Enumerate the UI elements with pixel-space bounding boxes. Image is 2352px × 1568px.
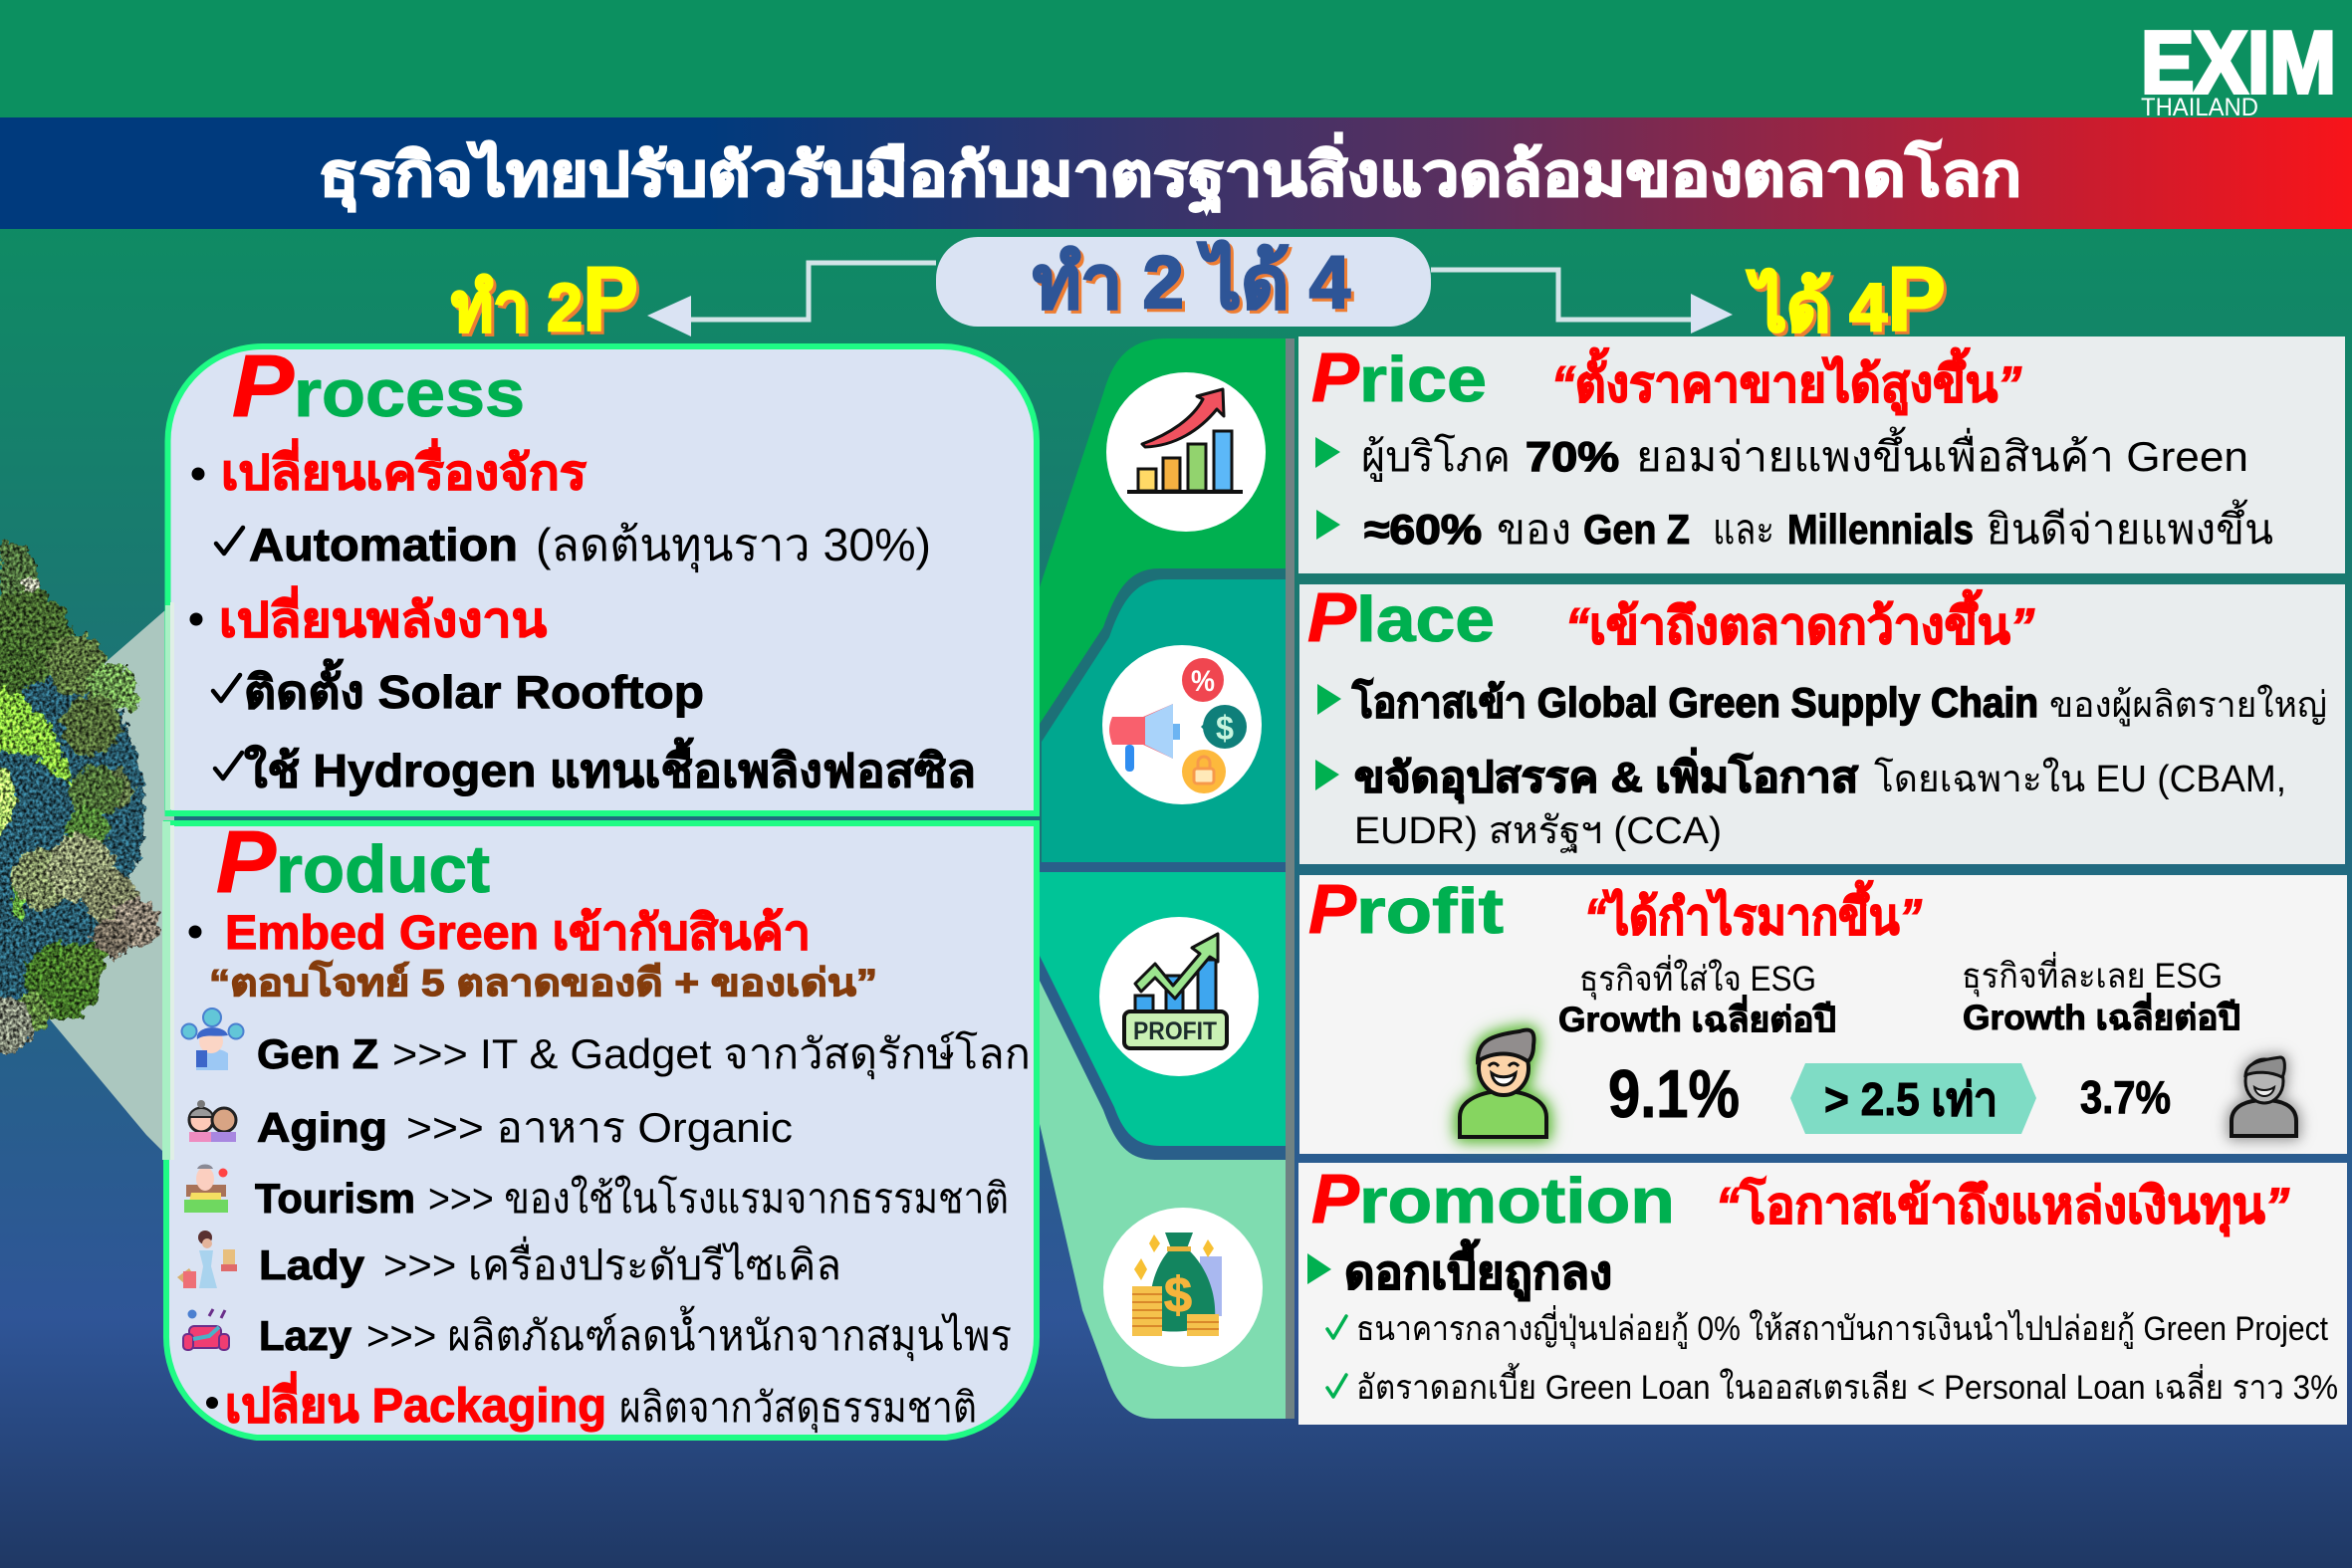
logo: EXIM Thailand: THAILAND [2141, 94, 2258, 121]
panel: place [1299, 578, 2345, 864]
icon: profit growth chart: PROFIT [1133, 1017, 1217, 1045]
heading: do 2P: ทำ 2 [451, 270, 583, 345]
bullet: remove barriers: ขจัดอุปสรรค & เพิ่มโอกาส [1354, 748, 1858, 803]
text: hydrogen: ใช้ Hydrogen แทนเชื้อเพลิงฟอสซิล [244, 737, 976, 796]
arrow: to 2P [647, 263, 936, 336]
panel: process [167, 336, 1037, 813]
panel: promotion [1298, 1160, 2347, 1425]
title banner [0, 117, 2352, 229]
row: Tourism: Tourism [255, 1175, 415, 1222]
heading: get 4P [1747, 249, 1946, 350]
row: Gen Z: >>> IT & Gadget จากวัสดุรักษ์โลก [392, 1029, 1031, 1080]
bullet: 70 percent [1315, 426, 2248, 482]
text: automation [216, 519, 931, 573]
icon: megaphone with bubbles [1102, 645, 1262, 804]
bullet: 70 percent: ยอมจ่ายแพงขึ้นเพื่อสินค้า Green [1636, 426, 2248, 480]
heading: Profit [1308, 870, 1504, 948]
quote: profit: “ได้กำไรมากขึ้น” [1584, 880, 1922, 945]
bullet: 60 percent: ≈60% [1364, 506, 1482, 553]
icon: gray person [2232, 1057, 2296, 1136]
text: ESG-neglecting businesses [1962, 952, 2240, 1037]
heading: Product [216, 812, 490, 911]
centre pill: do 2 get 4 [936, 237, 1431, 327]
heading: get 4P: ได้ 4 [1747, 268, 1887, 345]
heading: get 4P: P [1887, 249, 1946, 350]
heading: Price [1311, 338, 1487, 416]
heading: Place [1307, 578, 1495, 656]
heading: Product: P [216, 812, 276, 911]
heading: Product: roduct [276, 832, 490, 907]
text: change machinery: เปลี่ยนเครื่องจักร [221, 438, 587, 500]
text: ESG-minded businesses: ธุรกิจที่ใส่ใจ ESG [1579, 955, 1816, 1000]
funnel tabs [1040, 338, 1294, 1419]
heading: Promotion: romotion [1359, 1165, 1675, 1236]
icon: megaphone with bubbles: % [1191, 665, 1215, 698]
row: Tourism: >>> ของใช้ในโรงแรมจากธรรมชาติ [428, 1174, 1009, 1222]
row: Aging: Aging [257, 1104, 387, 1151]
text: ESG-minded businesses [1558, 955, 1836, 1039]
heading: do 2P [451, 249, 638, 350]
text: change energy: เปลี่ยนพลังงาน [219, 585, 547, 647]
globe image [0, 542, 174, 1163]
bullet: 70 percent: ผู้บริโภค [1361, 432, 1511, 482]
arrow: to 4P [1431, 270, 1733, 334]
badge: more than 2.5 times [1790, 1063, 2036, 1134]
heading: Process: P [232, 336, 294, 435]
text: solar rooftop: ติดตั้ง Solar Rooftop [244, 658, 704, 718]
heading: Place: lace [1356, 583, 1495, 655]
text: embed green: Embed Green เข้ากับสินค้า [225, 907, 811, 960]
text: five markets quote: “ตอบโจทย์ 5 ตลาดของดี + ของเด่น” [209, 960, 877, 1005]
bullet: lower interest: ดอกเบี้ยถูกลง [1344, 1238, 1612, 1301]
badge: more than 2.5 times: > 2.5 เท่า [1824, 1073, 1998, 1125]
logo: EXIM Thailand: EXIM [2141, 13, 2336, 112]
panel: profit [1299, 870, 2347, 1154]
text: change packaging: ผลิตจากวัสดุธรรมชาติ [619, 1384, 977, 1434]
text: ESG-minded businesses: Growth เฉลี่ยต่อปี [1558, 995, 1836, 1039]
row: Lazy: Lazy [259, 1312, 353, 1359]
text: change packaging [206, 1371, 977, 1434]
icon: money bag and coins: $ [1164, 1267, 1192, 1323]
bullet: global supply chain: โอกาสเข้า Global Green Supply Chain [1351, 678, 2038, 726]
row: Lazy: >>> ผลิตภัณฑ์ลดน้ำหนักจากสมุนไพร [366, 1305, 1012, 1362]
text: automation: Automation [249, 519, 518, 570]
row: Aging [189, 1100, 793, 1151]
quote: price: “ตั้งราคาขายได้สูงขึ้น” [1551, 347, 2021, 415]
row: Lady [177, 1231, 841, 1288]
text: change packaging: เปลี่ยน Packaging [225, 1371, 606, 1433]
bullet: 70 percent: 70% [1526, 433, 1619, 480]
heading: Promotion: P [1311, 1160, 1359, 1237]
quote: promotion: “โอกาสเข้าถึงแหล่งเงินทุน” [1716, 1176, 2289, 1236]
heading: Price: P [1311, 338, 1359, 416]
row: Tourism [184, 1165, 1009, 1222]
stat: 9.1 percent: 9.1% [1608, 1056, 1740, 1132]
row: Lady: Lady [259, 1241, 365, 1288]
row: Gen Z: Gen Z [257, 1030, 378, 1077]
icon: profit growth chart [1099, 917, 1259, 1076]
text: automation: (ลดต้นทุนราว 30%) [536, 519, 931, 573]
bullet: global supply chain: ของผู้ผลิตรายใหญ่ [2049, 684, 2327, 727]
title banner: ธุรกิจไทยปรับตัวรับมือกับมาตรฐานสิ่งแวดล้อมของตลาดโลก [319, 132, 2021, 213]
icon: rising bar chart [1106, 372, 1266, 532]
stat: 3.7 percent: 3.7% [2080, 1071, 2171, 1123]
bullet: 60 percent: Millennials [1787, 506, 1974, 553]
text: ESG-neglecting businesses: Growth เฉลี่ยต่อปี [1963, 993, 2240, 1037]
heading: Price: rice [1359, 343, 1487, 415]
row: Gen Z [181, 1008, 1031, 1080]
row: Lady: >>> เครื่องประดับรีไซเคิล [383, 1236, 841, 1288]
panel: product [162, 602, 1037, 1438]
icon: megaphone with bubbles: $ [1216, 710, 1234, 748]
heading: Process [232, 336, 525, 435]
quote: place: “เข้าถึงตลาดกว้างขึ้น” [1565, 589, 2034, 654]
heading: Place: P [1307, 578, 1356, 656]
heading: Profit: rofit [1356, 875, 1504, 947]
icon: happy green person [1460, 1030, 1546, 1137]
panel: price [1298, 336, 2345, 573]
heading: Process: rocess [294, 356, 525, 431]
heading: Profit: P [1308, 870, 1356, 948]
bullet: 60 percent: Gen Z [1583, 506, 1690, 553]
bullet: remove barriers: EUDR) สหรัฐฯ (CCA) [1354, 810, 1722, 853]
centre pill: do 2 get 4: ทำ 2 ได้ 4 [1033, 239, 1350, 324]
bullet: 60 percent [1316, 499, 2273, 553]
bullet: remove barriers: โดยเฉพาะใน EU (CBAM, [1874, 757, 2286, 800]
bullet: 60 percent: ของ [1497, 506, 1571, 553]
heading: do 2P: P [583, 249, 638, 350]
row: Aging: >>> อาหาร Organic [406, 1104, 793, 1151]
text: ESG-neglecting businesses: ธุรกิจที่ละเลย ESG [1962, 952, 2223, 997]
icon: money bag and coins [1103, 1208, 1263, 1367]
row: Lazy [183, 1305, 1012, 1362]
bullet: remove barriers [1315, 748, 2286, 853]
bullet: 60 percent: ยินดีจ่ายแพงขึ้น [1987, 499, 2273, 553]
bullet: 60 percent: และ [1713, 506, 1774, 553]
